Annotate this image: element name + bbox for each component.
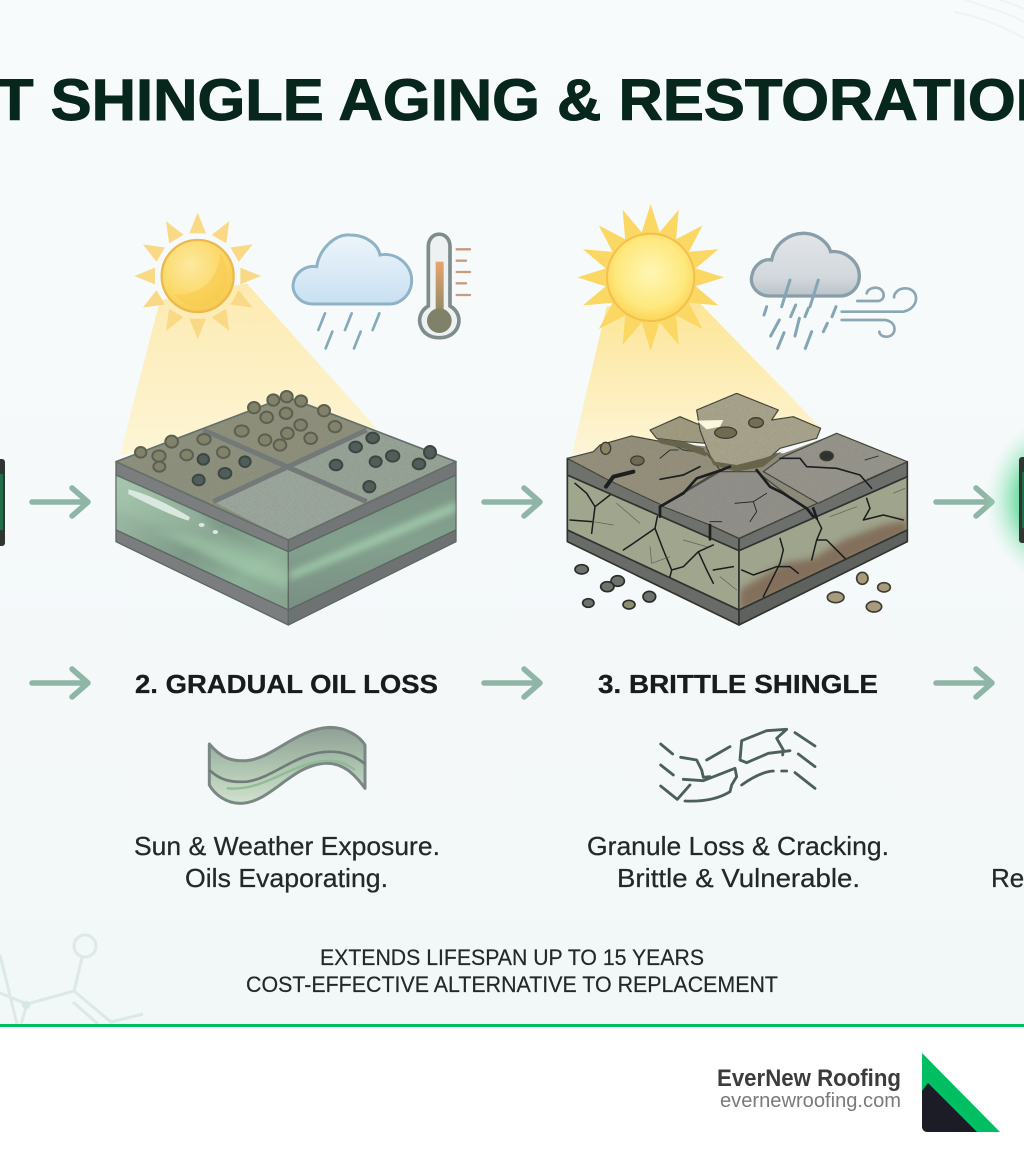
- loose granules: [575, 565, 656, 609]
- molecule watermark: [0, 935, 143, 1024]
- step 2 illustration: [116, 213, 470, 625]
- description: step 3: Brittle & Vulnerable.: [617, 863, 860, 893]
- arrow: step 1 to 2, illustration row: [32, 488, 88, 516]
- icon: cracked shingle: [661, 729, 815, 801]
- heading: step 3: 3. BRITTLE SHINGLE: [598, 669, 878, 699]
- icon: wind: [842, 288, 916, 337]
- heading: step 2: 2. GRADUAL OIL LOSS: [135, 669, 438, 699]
- summary text: EXTENDS LIFESPAN UP TO 15 YEARS: [320, 945, 704, 970]
- dark granules: [193, 433, 436, 492]
- top-face seams: [203, 430, 367, 502]
- step 4 glow and block fragment: [984, 414, 1024, 586]
- arrow: heading row, step 3 to 4: [936, 669, 992, 697]
- icon: drying shingle wave: [209, 727, 365, 803]
- icon: sun: [134, 213, 261, 339]
- cracked top surface: [567, 393, 907, 538]
- oil highlights: [128, 489, 218, 534]
- loose brown granules: [827, 572, 890, 612]
- arrow: step 2 to 3, illustration row: [484, 488, 540, 516]
- summary text: [246, 945, 778, 997]
- brand name: EverNew Roofing: [717, 1065, 901, 1092]
- brand url: evernewroofing.com: [720, 1090, 901, 1112]
- step 3 illustration: [567, 204, 916, 625]
- lifted shingle shadow: [657, 438, 782, 472]
- arrow: heading row, step 2 to 3: [484, 669, 540, 697]
- granules: [135, 391, 341, 472]
- description: step 2: Sun & Weather Exposure.: [134, 831, 440, 861]
- description: step 3: [587, 831, 889, 893]
- cracked block: side faces: [567, 475, 907, 610]
- arrow: step 3 to 4, illustration row: [936, 488, 992, 516]
- shingle block: side layers: [116, 462, 456, 625]
- icon: rain cloud: [293, 235, 412, 348]
- cracked block: bands: [567, 458, 907, 625]
- top cracks: [606, 450, 878, 539]
- icon: storm cloud: [751, 233, 859, 348]
- arrow: heading row, step 1 to 2: [32, 669, 88, 697]
- oil sheen: [116, 475, 288, 592]
- description: step 2: [134, 831, 440, 893]
- footer panel: [0, 1024, 1024, 1154]
- spots: [601, 418, 833, 465]
- hairline cracks: [593, 488, 905, 590]
- sunlight cone: [120, 283, 377, 455]
- icon: thermometer: [420, 234, 470, 338]
- decorative corner lines: [955, 0, 1024, 38]
- logo: [922, 1053, 1000, 1132]
- icon: sun: [577, 204, 724, 351]
- weathered patch: [739, 520, 907, 613]
- description: step 4 fragment: Re: [991, 863, 1024, 893]
- shingle block: top face: [116, 397, 456, 540]
- side cracks: [570, 483, 903, 597]
- summary text: COST-EFFECTIVE ALTERNATIVE TO REPLACEMENT: [246, 972, 778, 997]
- step 1 block fragment: [0, 459, 5, 546]
- description: step 3: Granule Loss & Cracking.: [587, 831, 889, 861]
- sunlight cone: [572, 300, 822, 455]
- description: step 2: Oils Evaporating.: [185, 863, 388, 893]
